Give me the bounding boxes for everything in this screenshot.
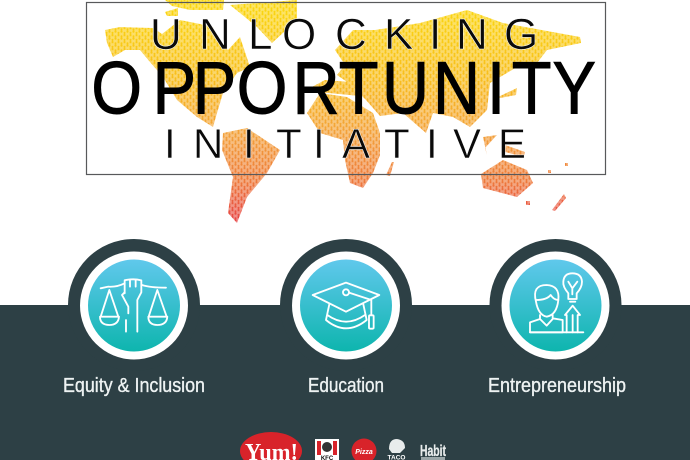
logo: KFC <box>315 439 339 460</box>
logo: Taco Bell <box>388 439 405 460</box>
dark footer band <box>0 305 690 460</box>
icon: person with lightbulb and arrow <box>530 273 583 332</box>
label: Entrepreneurship: Entrepreneurship <box>488 374 626 397</box>
title: INITIATIVE: INITIATIVE <box>164 120 526 167</box>
label: Equity & Inclusion: Equity & Inclusion <box>63 374 205 397</box>
logo: Yum! <box>240 432 302 460</box>
logo: Pizza Hut: Pizza <box>355 449 373 456</box>
world map made of people <box>105 0 581 223</box>
logo: The Habit: Habit <box>420 443 446 460</box>
pillar: education <box>280 239 412 397</box>
logo: The Habit <box>420 443 446 460</box>
title: OPPORTUNITY: OPPORTUNITY <box>91 47 596 129</box>
icon: scales held by fist <box>100 279 167 332</box>
icon: graduation cap <box>313 283 379 329</box>
title: UNLOCKING: UNLOCKING <box>150 10 538 59</box>
logo: Pizza Hut <box>352 438 376 460</box>
title box <box>86 2 606 174</box>
pillar: entrepreneurship <box>488 239 626 397</box>
logos row <box>240 432 446 460</box>
pillar: equity and inclusion <box>63 239 205 397</box>
label: Education: Education <box>308 374 384 397</box>
